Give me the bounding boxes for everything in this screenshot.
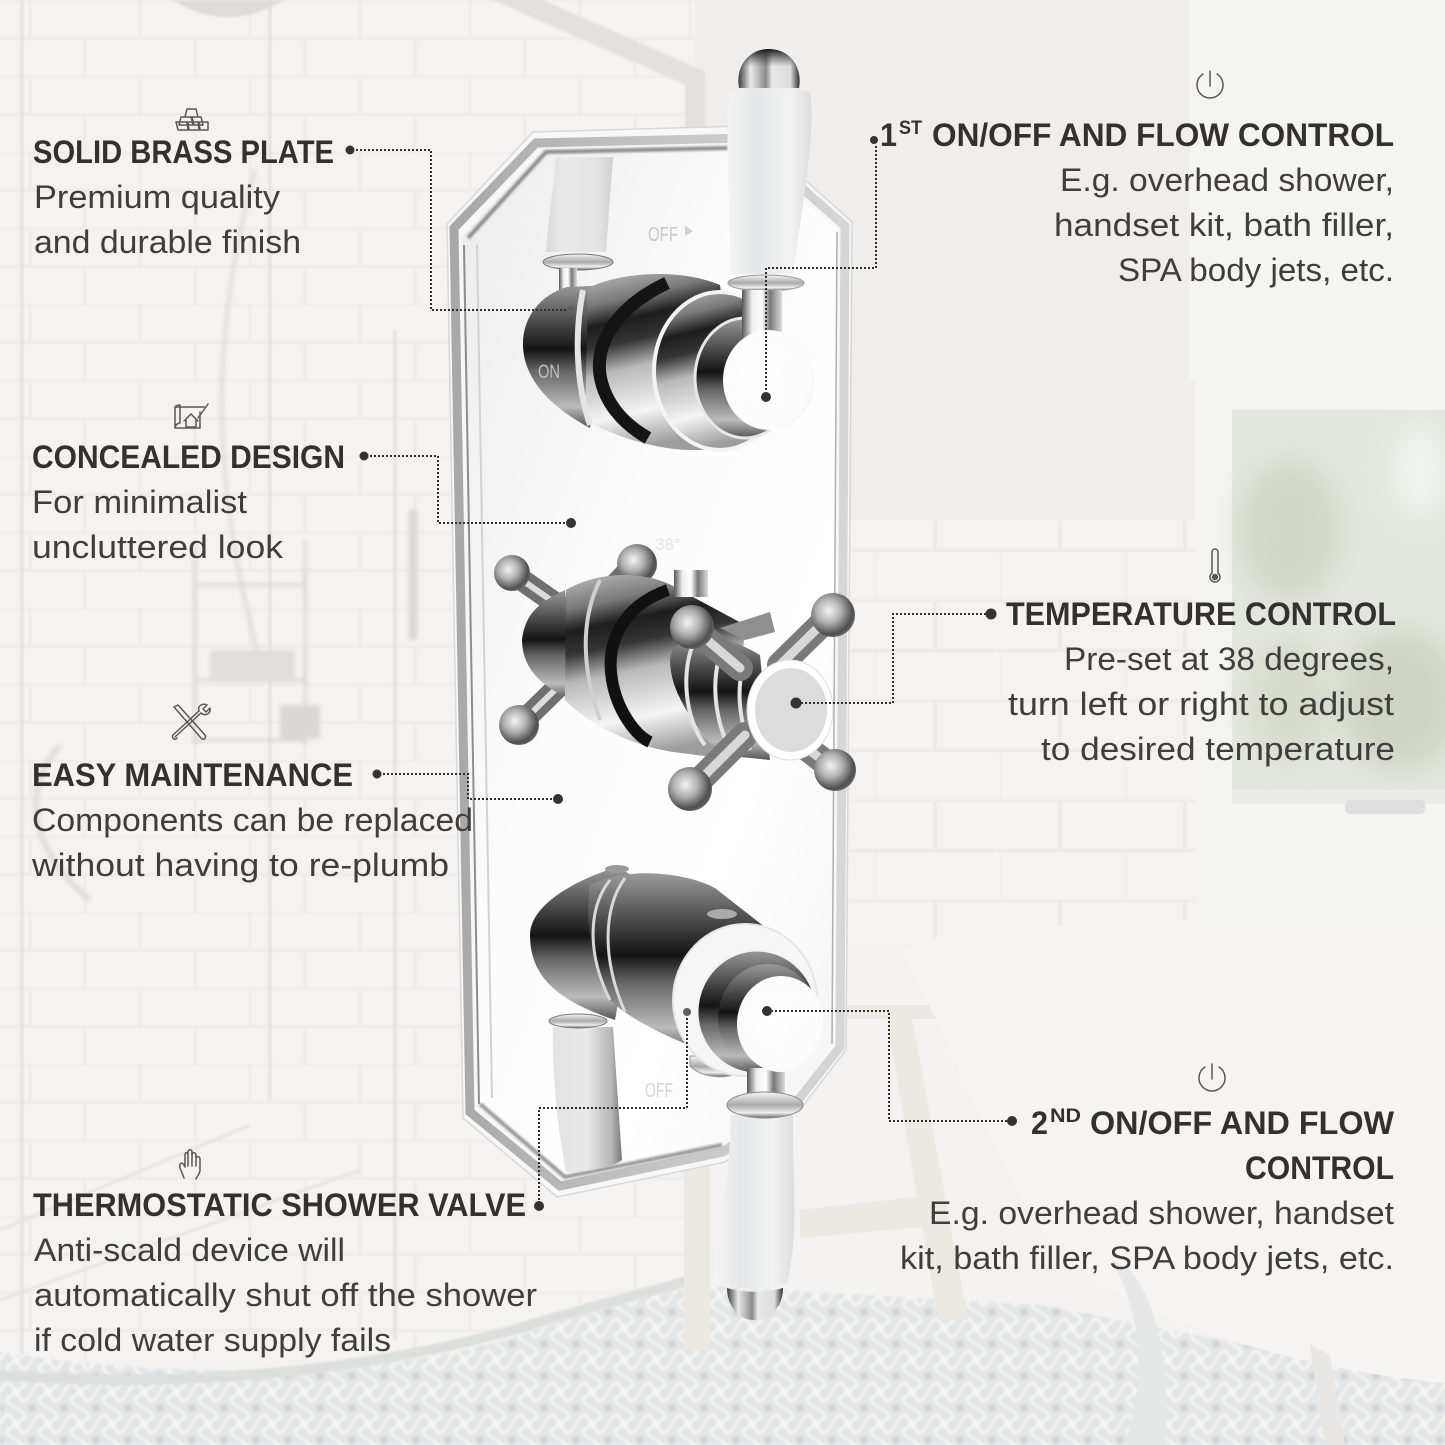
main cylinder: [565, 575, 745, 760]
text block: temperature control: [1006, 596, 1396, 767]
leader line: concealed design: [360, 452, 576, 528]
leader line: thermostatic valve: [534, 1008, 691, 1211]
text block: thermostatic shower valve: Anti-scald device will: [34, 1232, 345, 1268]
front hub: [670, 636, 770, 760]
centre cylinder: [588, 873, 775, 1055]
front cross arms: [690, 613, 835, 790]
text block: second on/off and flow control: ND: [1050, 1106, 1081, 1127]
leader line: solid brass plate: [346, 146, 575, 314]
text block: first on/off and flow control: ST: [899, 118, 922, 139]
text block: second on/off and flow control: [900, 1105, 1395, 1276]
white end cap: [737, 976, 825, 1072]
chrome dome: [738, 49, 800, 88]
back plate: 38°: [655, 535, 681, 554]
leader line: first on/off: [761, 136, 878, 402]
text block: solid brass plate: SOLID BRASS PLATE: [33, 134, 334, 170]
text block: thermostatic shower valve: automatically shut off the shower: [34, 1277, 537, 1313]
text block: easy maintenance: Components can be replaced: [32, 802, 473, 838]
text block: second on/off and flow control: CONTROL: [1245, 1150, 1394, 1186]
freestanding bathtub: [900, 919, 1445, 1445]
icon: crossed tools: [172, 704, 210, 739]
text block: second on/off and flow control: 2: [1031, 1105, 1048, 1141]
text block: thermostatic shower valve: THERMOSTATIC SHOWER VALVE: [33, 1187, 526, 1223]
rear wall and shower rail: [495, 0, 1445, 525]
text block: first on/off and flow control: 1: [880, 117, 897, 153]
text block: first on/off and flow control: [880, 117, 1394, 288]
icon: power: [1199, 1064, 1225, 1091]
leader line: temperature control: [790, 608, 996, 708]
patterned floor: [0, 1285, 1445, 1445]
lower right tiled wall: [850, 520, 1200, 940]
thermostatic valve product: [447, 49, 856, 1320]
text block: second on/off and flow control: ON/OFF AND FLOW: [1090, 1105, 1395, 1141]
text block: temperature control: turn left or right to adjust: [1008, 686, 1394, 722]
icon: power: [1197, 71, 1223, 98]
window with trees: [1195, 378, 1445, 938]
rear wing reflection: [720, 612, 775, 640]
text block: temperature control: to desired temperature: [1041, 731, 1395, 767]
text block: first on/off and flow control: ON/OFF AND FLOW CONTROL: [932, 117, 1394, 153]
rear cross arms: [512, 562, 637, 727]
text block: first on/off and flow control: handset kit, bath filler,: [1054, 207, 1394, 243]
rear dark cylinder: [523, 285, 612, 428]
top lever valve: ON: [538, 362, 560, 383]
text block: concealed design: uncluttered look: [32, 529, 284, 565]
back plate: OFF: [648, 224, 678, 246]
top lever valve: [523, 49, 815, 450]
rear ceramic lever: [553, 1027, 622, 1172]
text block: concealed design: [32, 439, 345, 565]
end cap: [747, 660, 833, 760]
text block: solid brass plate: Premium quality: [34, 179, 280, 215]
tiled shower wall: [0, 0, 700, 1360]
text block: thermostatic shower valve: [33, 1187, 537, 1358]
text block: concealed design: CONCEALED DESIGN: [32, 439, 345, 475]
collar ring and stepped knob: [673, 924, 817, 1076]
text block: second on/off and flow control: E.g. overhead shower, handset: [929, 1195, 1394, 1231]
text block: temperature control: Pre-set at 38 degrees,: [1064, 641, 1394, 677]
centre cross-head valve: [494, 544, 856, 811]
rear ceramic lever: [546, 157, 613, 252]
text block: solid brass plate: and durable finish: [34, 224, 301, 260]
text block: second on/off and flow control: kit, bath filler, SPA body jets, etc.: [900, 1240, 1394, 1276]
back plate: [447, 126, 852, 1197]
stepped knob: [695, 318, 795, 438]
icon: brass bars: [176, 109, 208, 130]
centre cylinder: [585, 274, 740, 450]
icon: thermometer: [1210, 549, 1220, 582]
top pin: [674, 570, 708, 597]
front lever: [713, 1115, 795, 1289]
text block: temperature control: TEMPERATURE CONTROL: [1006, 596, 1396, 632]
leader line: second on/off: [762, 1006, 1017, 1126]
back plate: OFF: [645, 1080, 673, 1102]
text block: solid brass plate: [33, 134, 334, 260]
chrome dome: [727, 1288, 783, 1320]
icon: house plan: [175, 404, 208, 428]
rear dark cylinder: [530, 867, 640, 1020]
icon: raised hand: [180, 1150, 200, 1179]
text block: easy maintenance: EASY MAINTENANCE: [32, 757, 353, 793]
shower hose and shelf caddy: [36, 170, 413, 900]
shower tray edge: [0, 1280, 691, 1380]
white end cap: [723, 330, 815, 430]
text block: first on/off and flow control: SPA body jets, etc.: [1118, 252, 1394, 288]
bottom lever valve: [530, 865, 825, 1320]
leader line: easy maintenance: [372, 770, 563, 804]
text block: easy maintenance: without having to re-plumb: [31, 847, 449, 883]
text block: concealed design: For minimalist: [32, 484, 247, 520]
collar ring: [654, 292, 786, 450]
text block: easy maintenance: [31, 757, 473, 883]
text block: first on/off and flow control: E.g. overhead shower,: [1060, 162, 1394, 198]
front ceramic lever: [727, 88, 812, 274]
stool: [684, 1005, 968, 1350]
text block: thermostatic shower valve: if cold water supply fails: [34, 1322, 391, 1358]
